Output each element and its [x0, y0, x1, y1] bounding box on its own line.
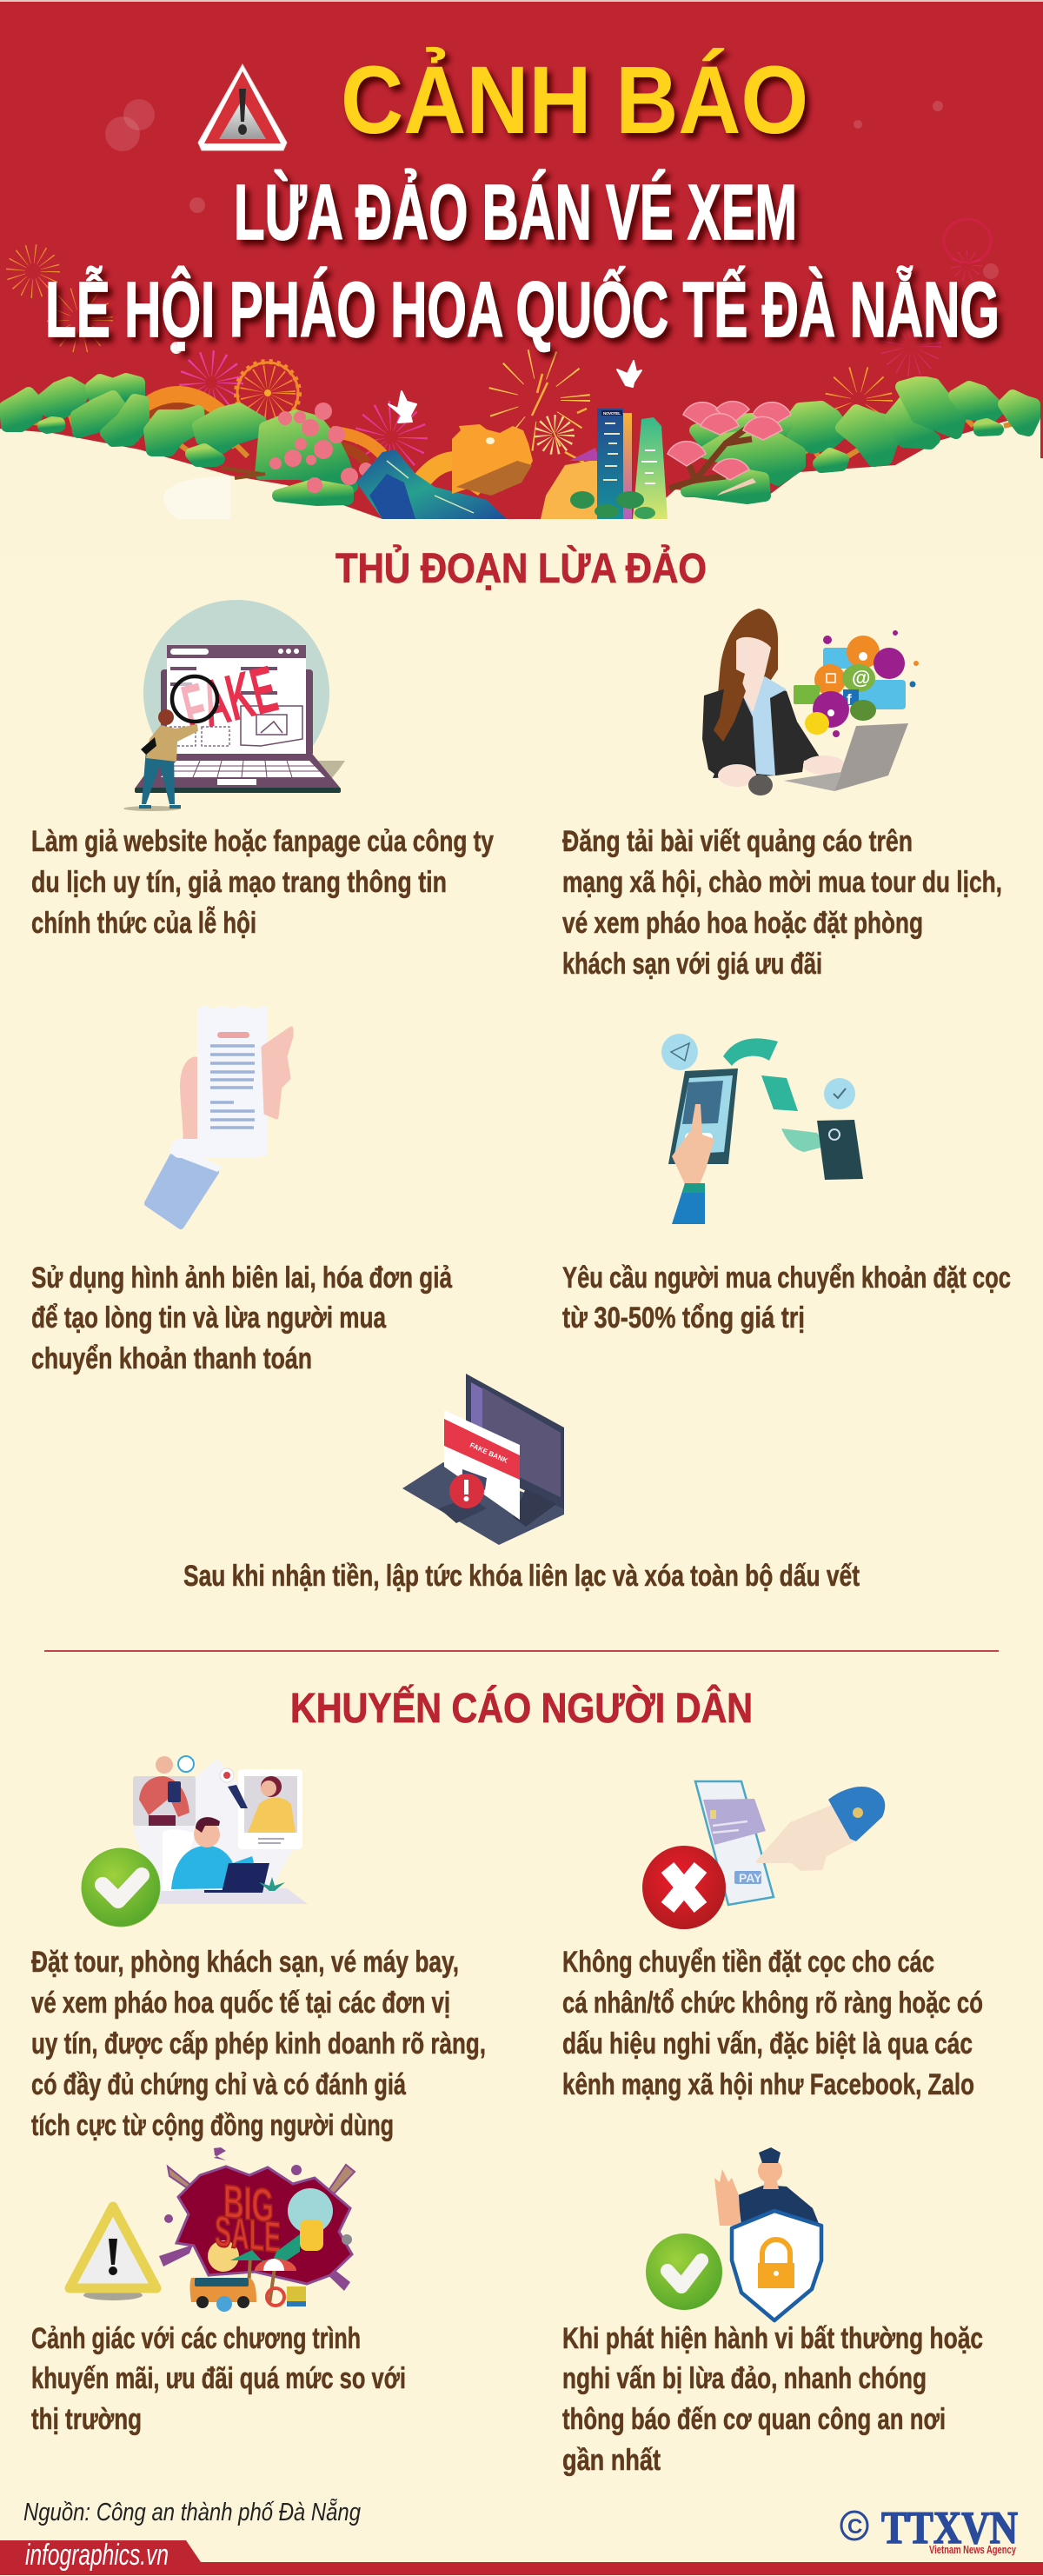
title [45, 47, 1000, 354]
text: recommendation 4: gần nhất [562, 2444, 661, 2477]
footer bar [0, 2539, 1043, 2575]
text: tactic 1: chính thức của lễ hội [31, 907, 256, 940]
text: recommendation 3: khuyến mãi, ưu đãi quá mức so với [31, 2362, 406, 2395]
text: recommendation 4 [562, 2322, 983, 2477]
icon: hand, phone and red cross: PAY [739, 1871, 762, 1885]
icon: police officer and shield [646, 2147, 821, 2320]
plum blossoms [269, 403, 373, 493]
cream landscape [0, 411, 1043, 556]
text: tactic 5: Sau khi nhận tiền, lập tức khóa liên lạc và xóa toàn bộ dấu vết [183, 1560, 860, 1593]
logo: TTXVN: C [847, 2515, 862, 2539]
text: recommendation 1 [31, 1946, 486, 2142]
footer bar: infographics.vn [25, 2539, 169, 2572]
text: tactic 2: vé xem pháo hoa hoặc đặt phòng [562, 907, 923, 940]
text: recommendation 1: vé xem pháo hoa quốc tế tại các đơn vị [31, 1987, 450, 2020]
firework: gold center [502, 363, 587, 463]
text: recommendation 4: nghi vấn bị lừa đảo, nhanh chóng [562, 2362, 927, 2395]
text: tactic 1: du lịch uy tín, giả mạo trang thông tin [31, 866, 447, 899]
icon: hand holding fake receipt [148, 1006, 291, 1226]
logo: TTXVN [841, 2503, 1018, 2556]
city towers [541, 409, 668, 519]
rainbow arches [139, 396, 456, 487]
icon: laptop with fake bank page: FAKE BANK [468, 1441, 509, 1465]
text: tactic 4 [562, 1261, 1011, 1335]
source note: Nguồn: Công an thành phố Đà Nẵng [23, 2498, 361, 2526]
text: recommendation 1: tích cực từ cộng đồng người dùng [31, 2109, 394, 2142]
icon: woman and social media [702, 609, 919, 795]
icon: doves [389, 361, 641, 423]
icon: woman and social media: @ [852, 667, 870, 689]
left pine trees [5, 379, 352, 500]
logo: TTXVN: TTXVN [881, 2503, 1018, 2553]
icon: fake website laptop: FAKE [176, 652, 284, 746]
icon: laptop with fake bank page [402, 1374, 564, 1545]
text: tactic 3: để tạo lòng tin và lừa người mua [31, 1301, 387, 1335]
firework: right magenta [838, 255, 977, 421]
divider [44, 1650, 999, 1652]
text: recommendation 3: thị trường [31, 2403, 142, 2436]
text: tactic 3: Sử dụng hình ảnh biên lai, hóa đơn giả [31, 1261, 453, 1295]
text: tactic 3 [31, 1261, 453, 1375]
text: recommendation 3: Cảnh giác với các chương trình [31, 2322, 361, 2355]
mountains [356, 449, 507, 519]
icon: fake website laptop [123, 600, 345, 811]
right pine trees [669, 383, 1034, 498]
text: tactic 2: khách sạn với giá ưu đãi [562, 948, 822, 981]
text: tactic 3: chuyển khoản thanh toán [31, 1342, 312, 1375]
heading: scam tactics: THỦ ĐOẠN LỪA ĐẢO [335, 544, 707, 592]
title: CẢNH BÁO [341, 47, 808, 154]
text: recommendation 1: uy tín, được cấp phép kinh doanh rõ ràng, [31, 2027, 486, 2060]
text: tactic 1: Làm giả website hoặc fanpage của công ty [31, 825, 494, 858]
city towers: NOVOTEL [603, 411, 621, 416]
text: recommendation 1: có đầy đủ chứng chỉ và có đánh giá [31, 2068, 406, 2101]
text: tactic 1 [31, 825, 494, 940]
text: recommendation 2 [562, 1946, 983, 2101]
icon: warning sign and big sale burst: SALE [215, 2207, 281, 2262]
text: tactic 2 [562, 825, 1002, 981]
text: tactic 2: Đăng tải bài viết quảng cáo trên [562, 825, 913, 858]
icon: woman and social media: f [847, 691, 852, 708]
firework: magenta and ferris wheel [192, 362, 413, 459]
text: recommendation 1: Đặt tour, phòng khách sạn, vé máy bay, [31, 1946, 459, 1979]
firework: gold left [16, 254, 102, 342]
icon: warning sign and big sale burst: BIG [223, 2175, 274, 2233]
header banner [0, 0, 1043, 556]
text: recommendation 3 [31, 2322, 406, 2436]
icon: phone money transfer [661, 1034, 863, 1224]
icon: people on social with green check [82, 1756, 308, 1927]
pine fan flowers [668, 402, 791, 480]
dragon [452, 424, 533, 496]
text: tactic 4: từ 30-50% tổng giá trị [562, 1301, 805, 1335]
heading: recommendations: KHUYẾN CÁO NGƯỜI DÂN [290, 1684, 753, 1732]
icon: warning triangle [198, 64, 287, 150]
icon: hand, phone and red cross [642, 1781, 885, 1929]
icon: warning sign and big sale burst [70, 2147, 355, 2312]
